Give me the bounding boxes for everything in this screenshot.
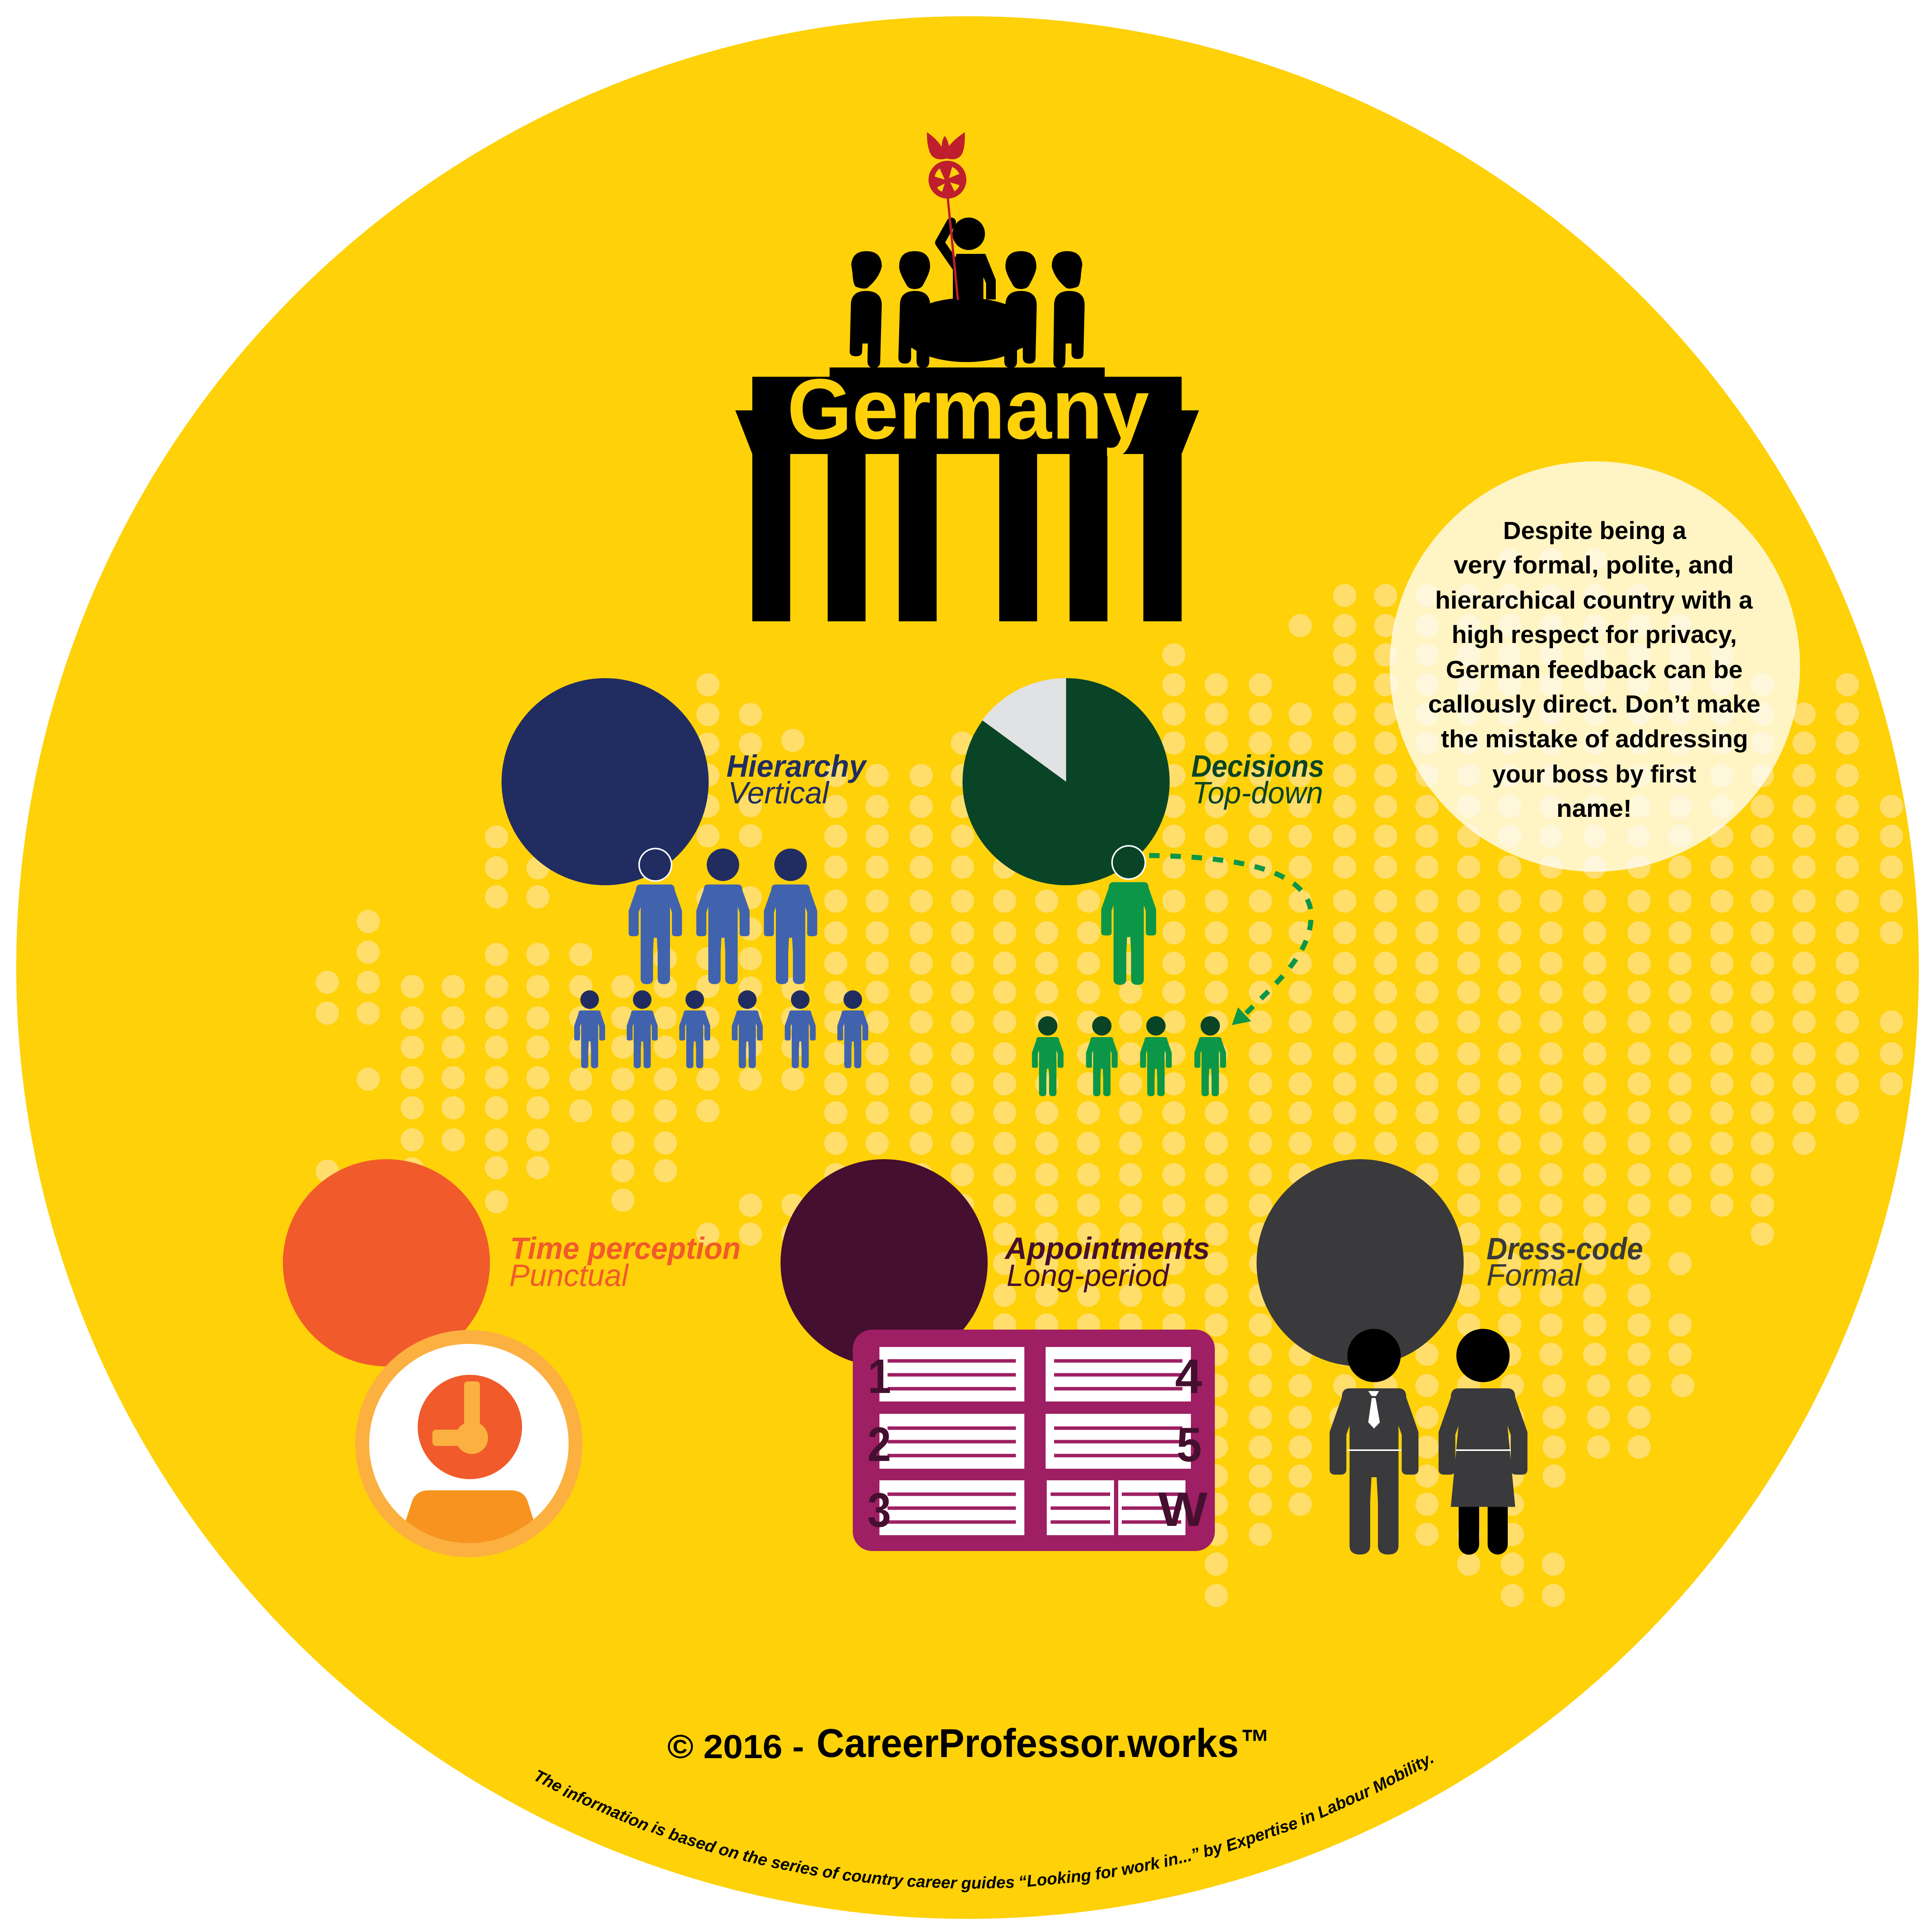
curved source note: in...” <box>1162 1844 1202 1871</box>
curved source note: Mobility. <box>1369 1748 1437 1797</box>
curved source note: guides <box>961 1873 1015 1893</box>
flag pole <box>948 199 958 300</box>
hierarchy label: Hierarchy <box>726 749 867 783</box>
curved source note <box>531 1748 1437 1893</box>
curved source note: information <box>560 1782 652 1835</box>
weekday numbers: 3 <box>867 1483 891 1537</box>
dotted world map <box>327 560 1891 1595</box>
seated figures around the table <box>850 218 1085 368</box>
callout text: Despite being a <box>1503 517 1686 544</box>
dress code disc <box>1257 1159 1464 1366</box>
hierarchy label <box>726 749 867 810</box>
time label: Time perception <box>510 1231 741 1265</box>
weekday numbers: W <box>1158 1483 1208 1536</box>
copyright line: CareerProfessor.works <box>816 1721 1239 1766</box>
dashed arrow <box>1149 855 1311 1025</box>
callout text: the mistake of addressing <box>1441 725 1748 753</box>
dress code label <box>1486 1231 1643 1292</box>
curved source note: in <box>1297 1806 1318 1829</box>
decisions label: Decisions <box>1191 749 1324 783</box>
callout text: callously direct. Don’t make <box>1428 690 1760 718</box>
time label: Punctual <box>509 1258 629 1293</box>
copyright line: © 2016 - <box>667 1728 804 1765</box>
callout text: hierarchical country with a <box>1435 586 1753 614</box>
panel: dress code <box>1257 1159 1643 1555</box>
Brandenburg gate icon with title <box>735 132 1199 621</box>
curved source note: work <box>1120 1854 1162 1879</box>
curved source note: on <box>717 1840 741 1863</box>
curved source note: the <box>741 1846 769 1870</box>
flag wheel and tulip <box>927 132 966 199</box>
curved source note: is <box>649 1818 668 1840</box>
curved source note: by <box>1201 1838 1225 1861</box>
appointments label <box>1004 1231 1210 1293</box>
four staff <box>1032 1016 1226 1096</box>
appointments disc <box>781 1159 988 1366</box>
weekday numbers: 1 <box>868 1350 891 1403</box>
callout text: high respect for privacy, <box>1452 621 1737 648</box>
callout bubble <box>1389 461 1800 872</box>
callout text: German feedback can be <box>1446 656 1743 684</box>
hierarchy disc <box>502 678 709 885</box>
callout text <box>1428 517 1760 822</box>
curved source note: The <box>531 1766 565 1796</box>
dress code label: Dress-code <box>1486 1231 1643 1266</box>
weekday numbers: 4 <box>1175 1350 1202 1403</box>
curved source note: Labour <box>1315 1781 1374 1822</box>
curved source note: series <box>770 1853 820 1880</box>
title: Germany <box>787 361 1149 457</box>
curved source note: of <box>821 1862 841 1883</box>
three managers <box>629 849 817 984</box>
weekday numbers <box>867 1350 1208 1537</box>
weekday numbers: 2 <box>867 1418 891 1471</box>
curved source note: for <box>1094 1862 1119 1883</box>
curved source note: Expertise <box>1223 1814 1300 1855</box>
decisions label <box>1191 749 1324 810</box>
time label <box>509 1231 741 1293</box>
panel: hierarchy <box>502 678 868 1068</box>
dress code label: Formal <box>1486 1258 1582 1292</box>
curved source note: career <box>906 1872 958 1893</box>
callout text: your boss by first <box>1492 760 1696 788</box>
gate structure <box>735 367 1199 621</box>
curved source note: based <box>667 1825 718 1857</box>
panel: appointments <box>781 1159 1215 1551</box>
panel: time perception <box>283 1159 741 1550</box>
hierarchy label: Vertical <box>728 776 830 810</box>
copyright line: ™ <box>1241 1723 1270 1762</box>
time disc <box>283 1159 490 1366</box>
six staff <box>574 990 868 1068</box>
decisions pie chart <box>963 678 1170 885</box>
appointments label: Appointments <box>1004 1231 1210 1265</box>
icon: clock-headed person <box>362 1337 576 1550</box>
callout text: name! <box>1556 794 1632 822</box>
weekday numbers: 5 <box>1177 1418 1202 1472</box>
decisions label: Top-down <box>1192 776 1323 810</box>
icon: woman in skirt <box>1439 1329 1527 1555</box>
curved source note: “Looking <box>1017 1866 1092 1891</box>
appointments label: Long-period <box>1007 1258 1170 1293</box>
panel: decisions <box>963 678 1324 1096</box>
icon: weekly calendar <box>853 1330 1215 1551</box>
curved source note: country <box>842 1866 905 1890</box>
icon: man in suit <box>1330 1329 1418 1554</box>
callout text: very formal, polite, and <box>1454 551 1734 579</box>
decision maker <box>1101 846 1156 985</box>
